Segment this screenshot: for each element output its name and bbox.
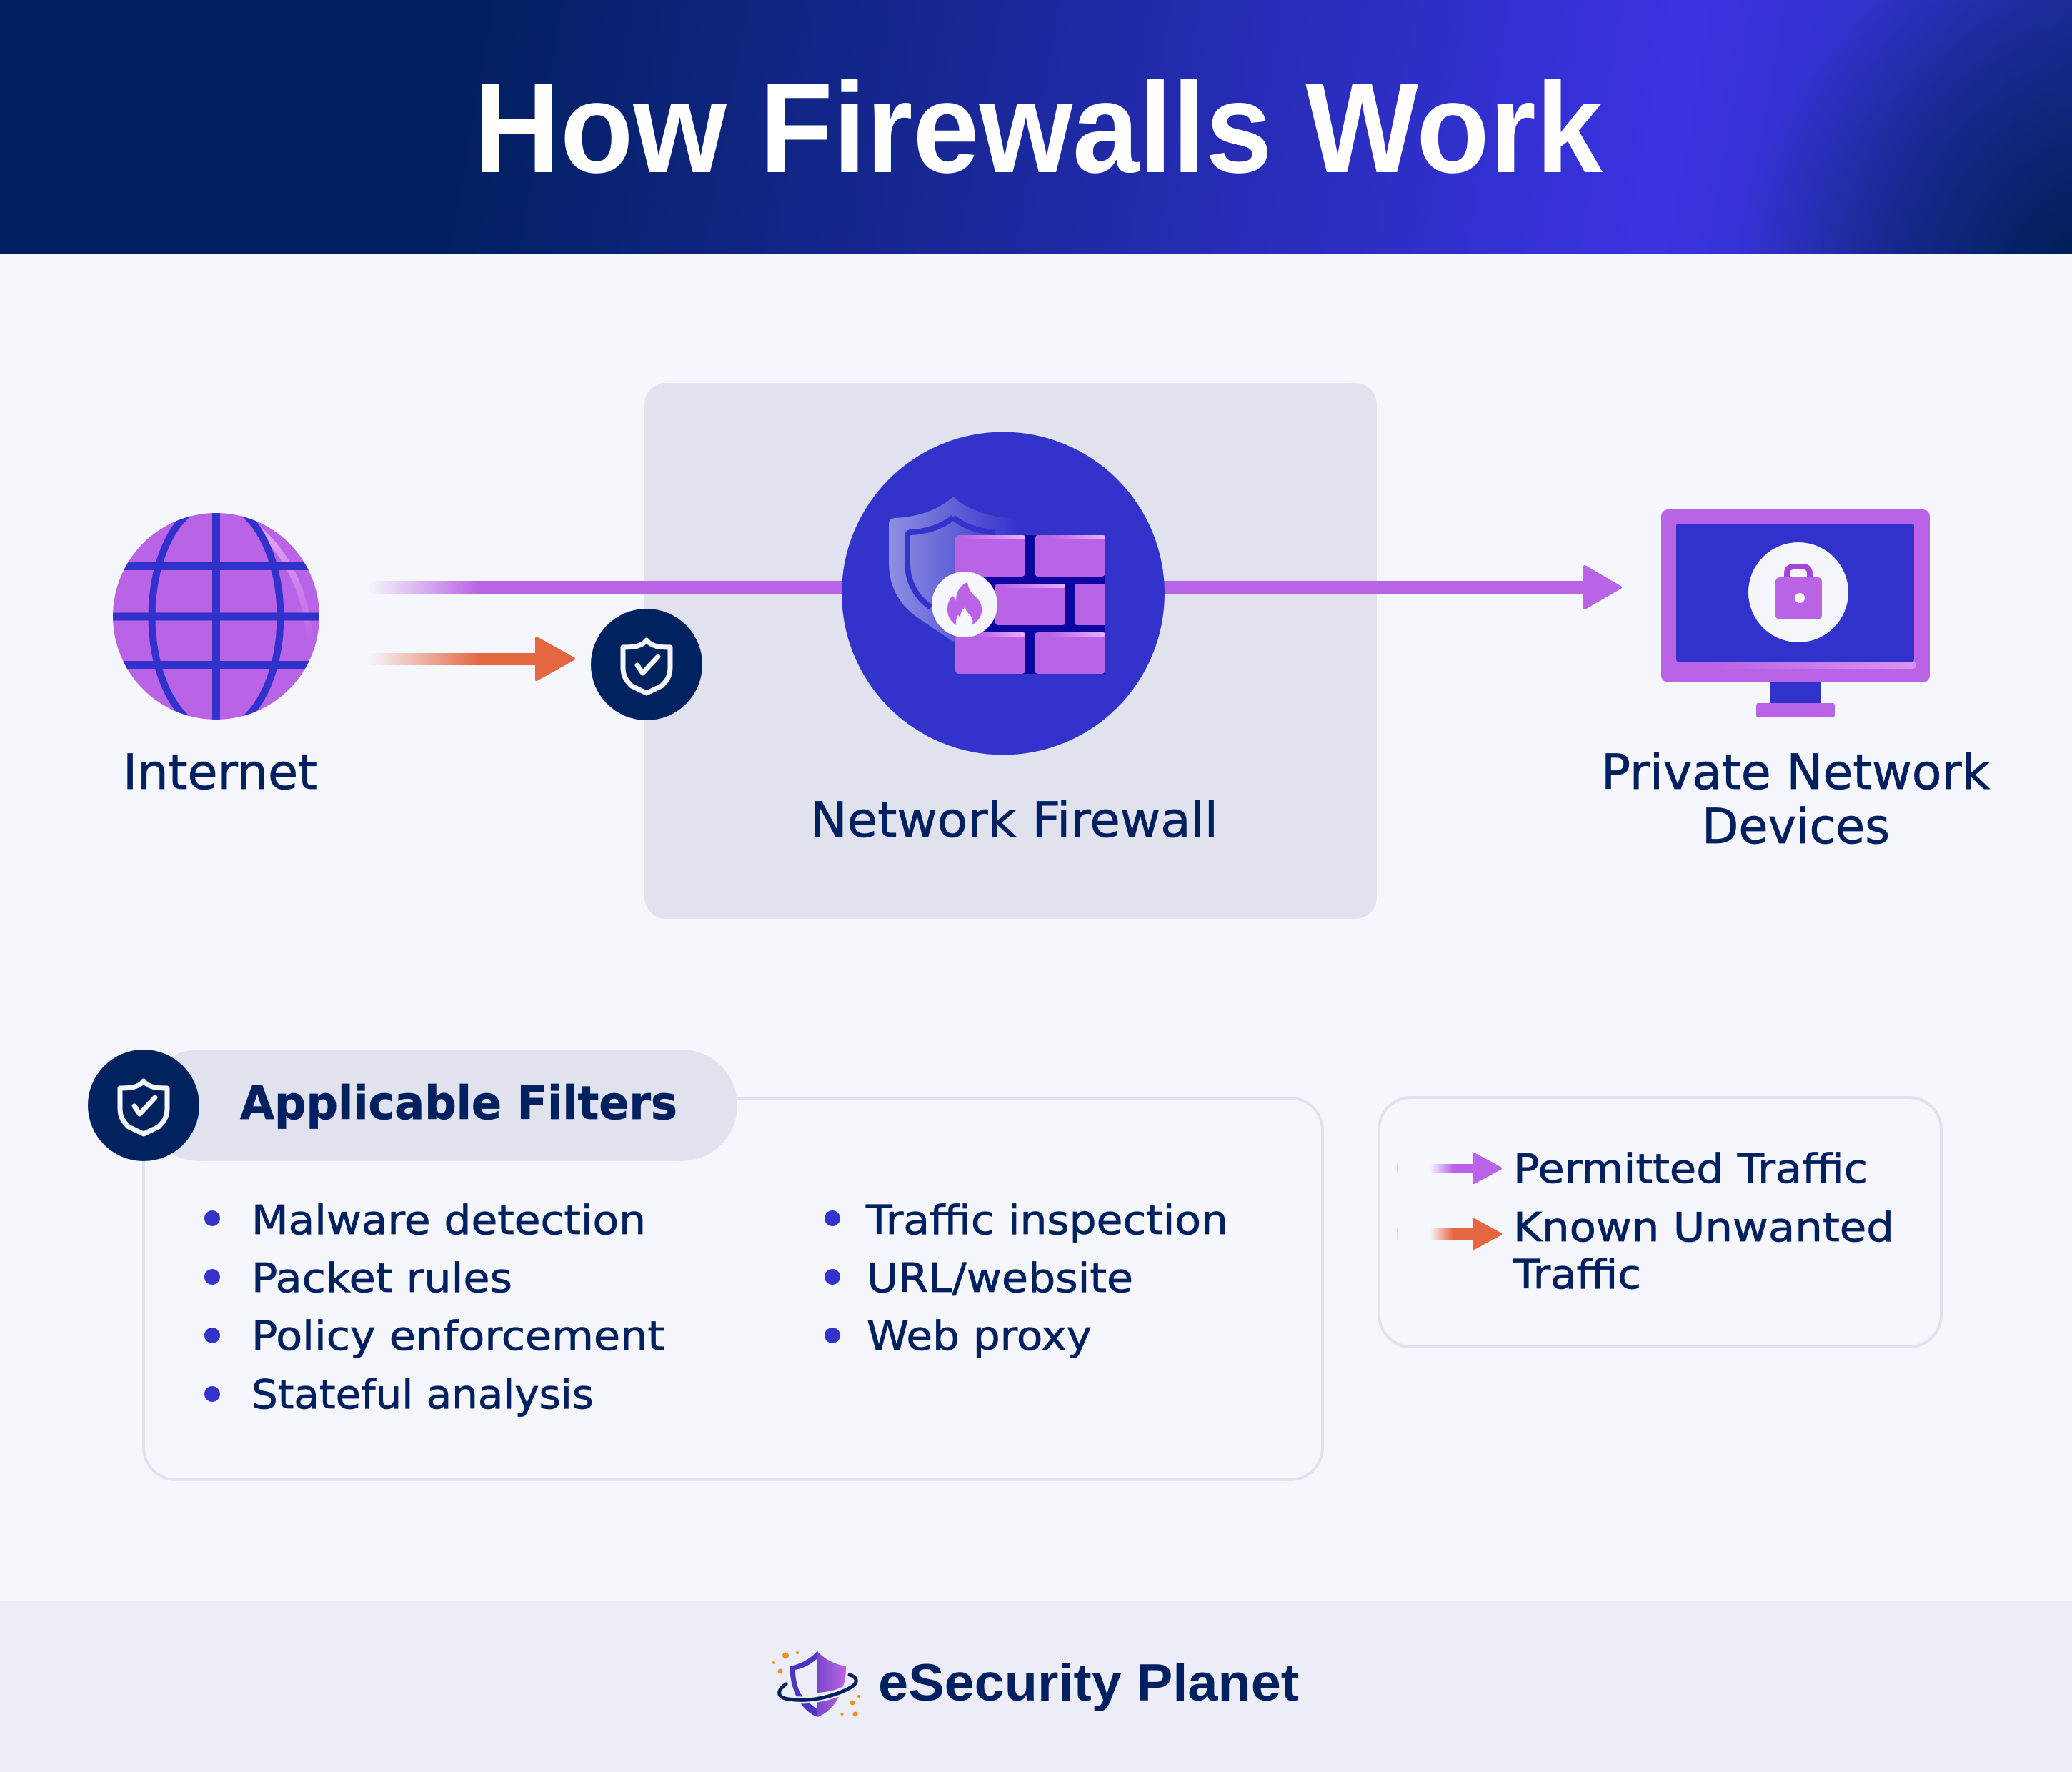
panel: legend	[1379, 1097, 1941, 1347]
arrow: permitted traffic through firewall	[369, 567, 1620, 608]
header banner	[0, 0, 2072, 254]
filter list: right column: Web proxy	[867, 1313, 1092, 1360]
legend arrow: permitted	[1397, 1154, 1500, 1183]
icon: flame badge	[932, 572, 997, 637]
logo: wordmark: eSecurity Planet	[878, 1654, 1299, 1712]
filter list: left column: Malware detection	[251, 1198, 646, 1244]
label: Network Firewall: Network Firewall	[810, 792, 1218, 849]
icon: brick wall	[955, 535, 1117, 674]
label: Private Network Devices	[1601, 745, 1991, 855]
label: Internet: Internet	[123, 745, 317, 801]
icon: filter shield badge	[591, 609, 702, 720]
filter list: left column	[204, 1198, 664, 1418]
legend label: permitted: Permitted Traffic	[1513, 1146, 1868, 1193]
heading pill	[88, 1050, 737, 1161]
label: Private Network Devices: Private Network	[1601, 745, 1991, 801]
panel: applicable filters	[88, 1050, 1323, 1480]
title: How Firewalls Work	[474, 56, 1603, 200]
arrow: known unwanted traffic	[369, 638, 574, 680]
filter list: left column: Policy enforcement	[251, 1313, 664, 1360]
icon: background shield	[889, 497, 1017, 642]
label: Private Network Devices: Devices	[1702, 799, 1890, 855]
footer band	[0, 1601, 2072, 1772]
legend arrow: unwanted	[1397, 1220, 1500, 1248]
filter list: right column	[825, 1198, 1228, 1360]
filter list: left column: Packet rules	[251, 1255, 512, 1302]
filter list: right column: Traffic inspection	[865, 1198, 1228, 1244]
icon: globe	[113, 513, 319, 720]
logo: shield mark	[772, 1651, 860, 1717]
legend label: unwanted	[1513, 1205, 1894, 1298]
icon: monitor with lock	[1661, 509, 1930, 717]
icon: firewall circle	[842, 432, 1165, 755]
filter list: left column: Stateful analysis	[251, 1372, 594, 1418]
panel: network firewall backdrop	[644, 383, 1377, 919]
legend label: unwanted: Traffic	[1513, 1252, 1641, 1298]
legend label: unwanted: Known Unwanted	[1513, 1205, 1894, 1251]
filter list: right column: URL/website	[867, 1255, 1133, 1302]
heading pill: Applicable Filters	[240, 1077, 677, 1130]
